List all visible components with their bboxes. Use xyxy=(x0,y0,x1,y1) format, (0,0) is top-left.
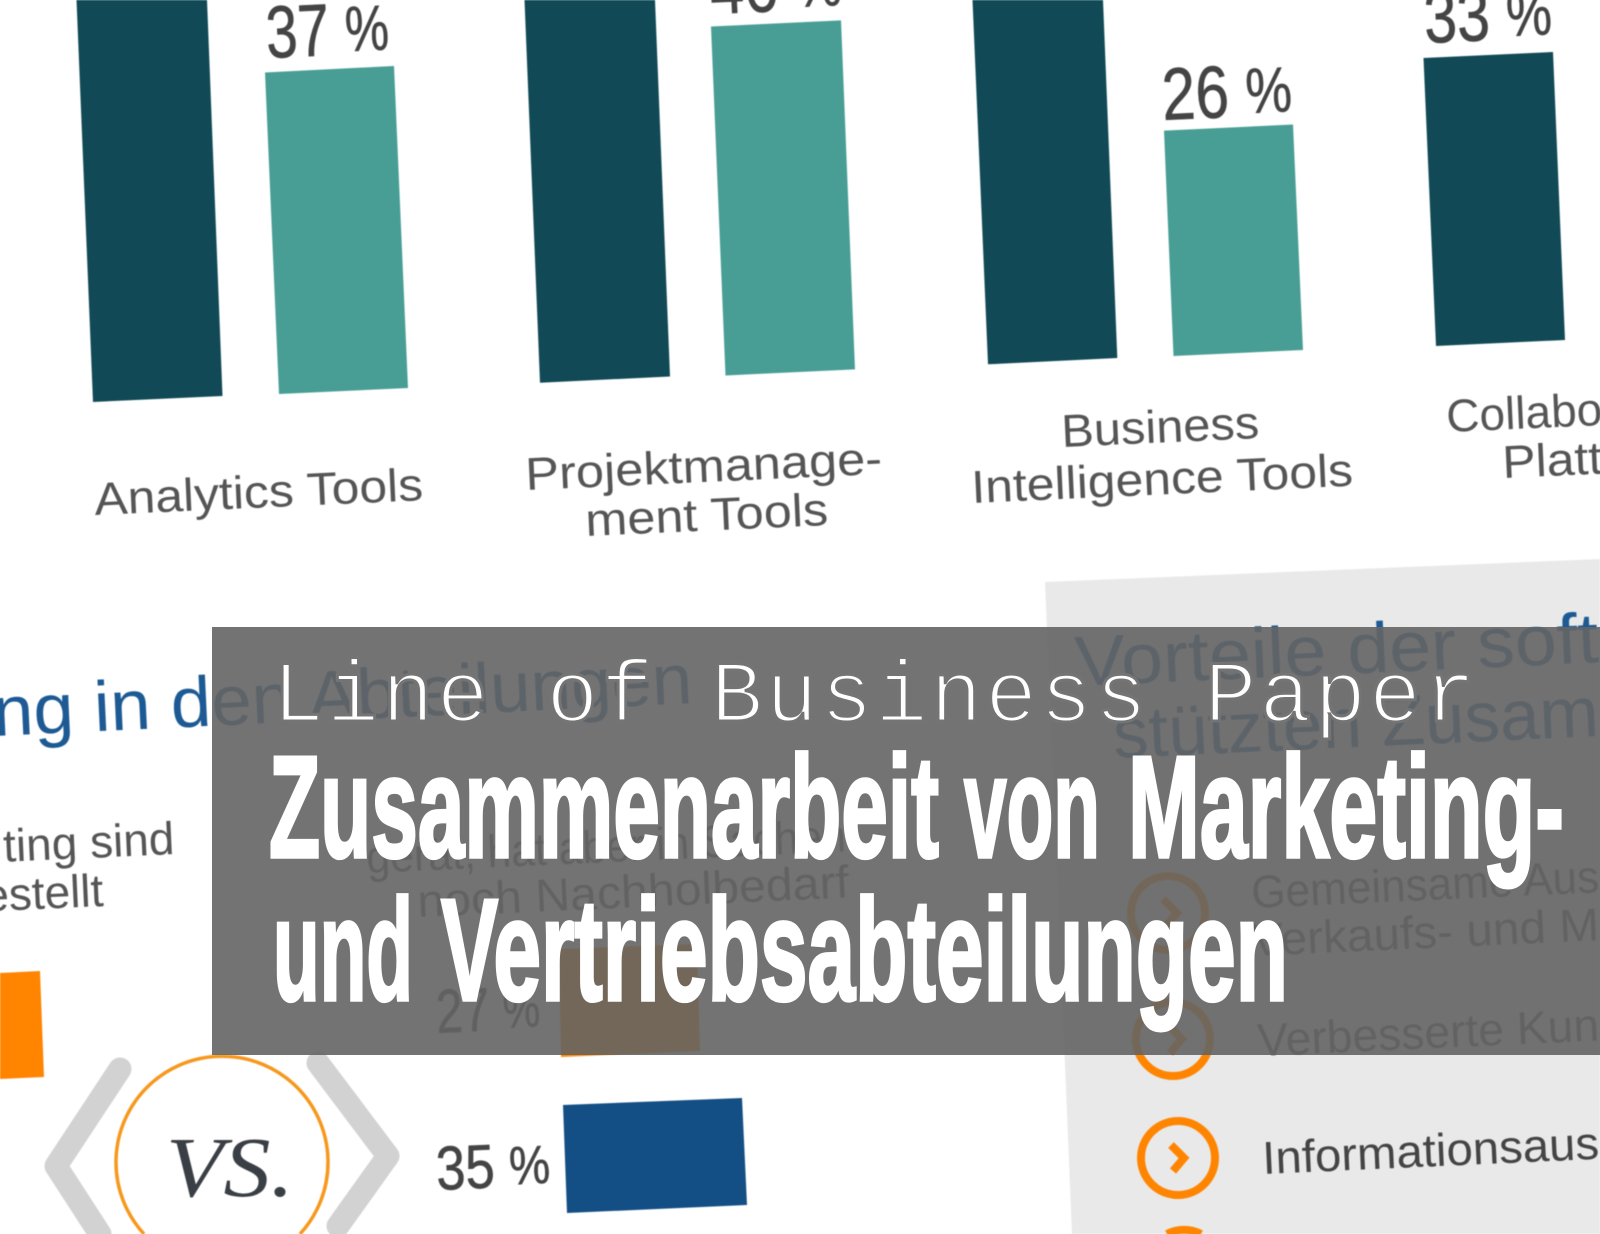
panel heading xyxy=(1073,599,1600,774)
benefit item: Informationsaustausch xyxy=(1141,1117,1600,1195)
section heading: usage in departments: ng in den Abteilungen xyxy=(0,640,694,752)
bar: 35 percent blue: 35 xyxy=(435,1132,507,1204)
group: Analytics Tools xyxy=(76,0,424,525)
panel: benefits xyxy=(1045,559,1600,1234)
text block: marketing staffing xyxy=(0,812,175,921)
bar: marketing orange left xyxy=(0,971,44,1079)
group: Collaboration Plattformen: Platt xyxy=(1501,431,1600,488)
benefit item icon, cut off xyxy=(1167,1230,1201,1234)
title: Zusammenarbeit xyxy=(269,726,939,888)
benefit item: Gemeinsame Ausrichtung xyxy=(1131,850,1600,966)
group: Business Intelligence Tools: 26 xyxy=(1160,49,1246,136)
title overlay band xyxy=(212,627,1600,1055)
bar: 35 percent blue xyxy=(435,1098,747,1213)
group: Projektmanagement Tools xyxy=(524,0,883,546)
benefit item: Verbesserte Kundenansprache xyxy=(1136,999,1600,1076)
group: Projektmanagement Tools: Projektmanage- xyxy=(524,432,883,500)
bar: 27 percent orange: % xyxy=(501,978,541,1040)
panel heading: stützten Zusam xyxy=(1111,673,1600,774)
bar: 35 percent blue: % xyxy=(508,1135,551,1197)
group: Collaboration Plattformen: Collabo xyxy=(1445,383,1600,442)
title: und xyxy=(273,869,413,1031)
group: Business Intelligence Tools: Intelligence Tools xyxy=(970,444,1354,513)
group: Business Intelligence Tools xyxy=(970,0,1354,513)
panel heading: Vorteile der soft xyxy=(1073,599,1600,702)
benefit item: Informationsaustausch: Informationsaus xyxy=(1261,1117,1600,1184)
text block: marketing staffing: ting sind xyxy=(2,812,175,872)
benefit item: Gemeinsame Ausrichtung: Verkaufs- und M xyxy=(1250,898,1600,966)
group: Analytics Tools: Analytics Tools xyxy=(93,458,424,525)
text block: hidden note: gerät, hat aber in Sachen xyxy=(365,809,847,883)
subtitle: Line of Business Paper xyxy=(272,650,1476,748)
benefit item: Verbesserte Kundenansprache: Verbesserte Kun xyxy=(1256,999,1600,1066)
group: Collaboration Plattformen xyxy=(1422,0,1600,488)
icon: versus badge: VS. xyxy=(166,1119,294,1215)
bar: 27 percent orange xyxy=(435,944,700,1057)
group: Projektmanagement Tools: ment Tools xyxy=(584,483,829,546)
group: Business Intelligence Tools: % xyxy=(1244,53,1293,127)
group: Business Intelligence Tools: Business xyxy=(1060,396,1260,457)
icon: versus badge xyxy=(56,1056,388,1234)
bar: 27 percent orange: 27 xyxy=(435,975,507,1047)
title xyxy=(269,726,1564,1031)
title: von xyxy=(964,726,1100,888)
bar chart: tool usage xyxy=(76,0,1600,546)
text block: hidden note xyxy=(365,809,850,927)
text block: hidden note: noch Nachholbedarf xyxy=(416,855,850,927)
